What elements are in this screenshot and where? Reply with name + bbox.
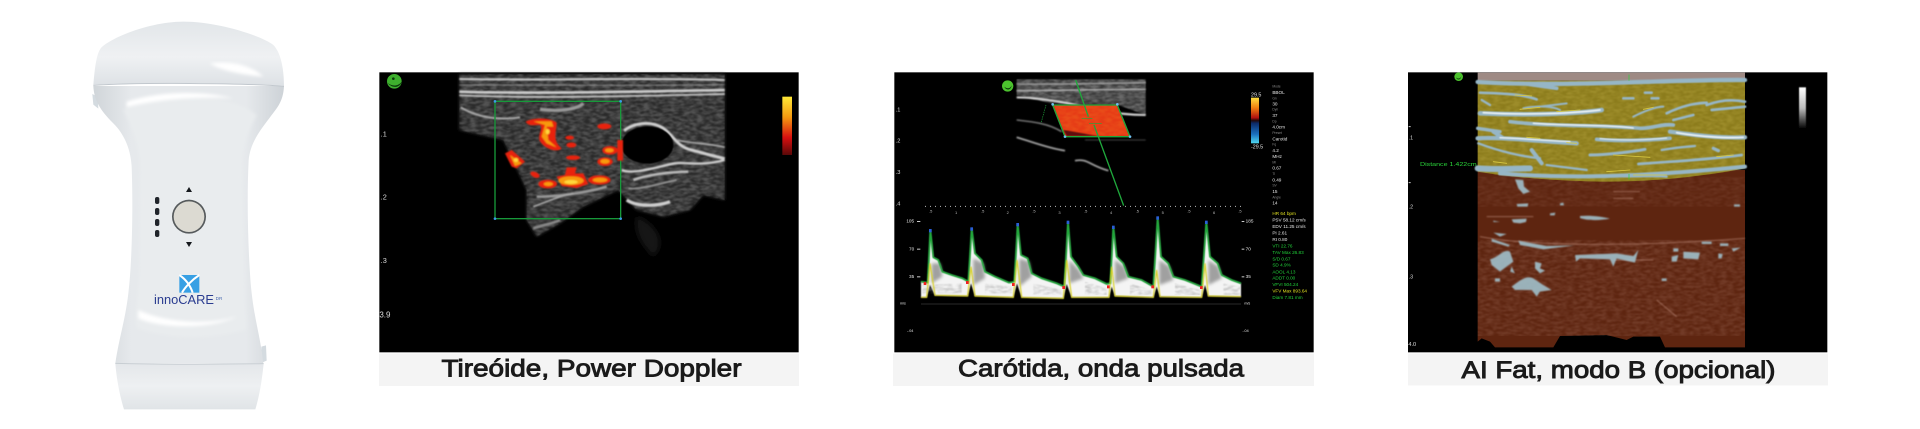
measurement column: RI 0.80: [1272, 237, 1288, 242]
settings column: Dyn: [1272, 108, 1278, 112]
measurement column: TAV Max 26.83: [1272, 250, 1304, 255]
caption: carotid: Carótida, onda pulsada: [958, 356, 1245, 382]
body inset panel: [123, 97, 257, 337]
depth labels: [896, 108, 900, 208]
settings column: 0.49: [1272, 177, 1282, 182]
orientation icon: [1454, 72, 1463, 81]
colour scale: -29.5: [1251, 145, 1263, 151]
head seam: [93, 83, 284, 86]
depth labels: .1: [896, 108, 900, 114]
colour scale: [1251, 93, 1263, 151]
measurement column: VFV Max 893.64: [1272, 289, 1307, 294]
side nubs: [92, 94, 267, 363]
measurement column: PI 2.61: [1272, 231, 1287, 236]
grey tissue: [459, 74, 725, 257]
time scale: .5: [1136, 209, 1140, 214]
measurement column: HR 64 bpm: [1272, 211, 1296, 216]
velocity axes: 70: [1246, 246, 1251, 251]
settings column: 0.67: [1272, 166, 1282, 171]
orientation icon: [1002, 80, 1013, 92]
time scale: .5: [1187, 209, 1191, 214]
depth labels: .2: [381, 193, 387, 202]
time scale: .5: [981, 209, 985, 214]
panel: AI fat b-mode: [1408, 72, 1827, 352]
measure marks: [1628, 75, 1630, 179]
muscle layer: [1478, 170, 1745, 347]
velocity axes: -.04: [1242, 329, 1249, 333]
depth labels: .2: [1409, 205, 1413, 211]
highlights on body: [127, 93, 237, 326]
scan background: [379, 72, 799, 352]
depth labels: .3: [896, 170, 900, 176]
settings column: Carotid: [1272, 136, 1288, 141]
probe body: [93, 86, 284, 363]
caption: thyroid: [379, 354, 799, 386]
scan background: [1408, 72, 1827, 352]
velocity axes: 70: [909, 246, 915, 251]
settings column: Gn: [1272, 96, 1277, 100]
region of interest box: [494, 100, 622, 220]
time scale: .5: [1032, 209, 1036, 214]
depth labels: .1: [381, 129, 387, 138]
bright reflections: [1483, 110, 1743, 142]
indicator LEDs: [155, 197, 159, 237]
measurement column: VTI 22.76: [1272, 244, 1293, 249]
depth labels: .4: [896, 202, 900, 208]
scan background: [894, 72, 1314, 352]
settings column: 37: [1272, 113, 1278, 118]
caption: thyroid: Tireóide, Power Doppler: [442, 356, 742, 382]
time scale: [925, 206, 1242, 215]
depth labels: .3: [381, 256, 387, 265]
velocity axes: 35: [1246, 274, 1251, 279]
bottom cap: [115, 363, 264, 409]
depth labels: .1: [1409, 135, 1413, 141]
settings column: Dp: [1272, 119, 1277, 123]
measurement column: [1272, 211, 1307, 300]
time scale: 1: [955, 210, 958, 215]
settings column: Fq: [1272, 143, 1276, 147]
velocity axes: m/s: [900, 301, 906, 305]
panel: thyroid power doppler: [379, 72, 799, 352]
settings column: Preset: [1272, 131, 1282, 135]
velocity axes: [900, 219, 1254, 333]
depth labels: .2: [896, 139, 900, 145]
settings column: 30: [1272, 101, 1278, 106]
settings column: MHz: [1272, 154, 1283, 159]
time scale: .5: [929, 209, 933, 214]
caption: carotid: [893, 354, 1314, 386]
colour scale: [782, 97, 792, 155]
colour box with flow: [1051, 103, 1131, 138]
doppler cursor line: [1041, 80, 1124, 206]
measurement column: S/D 0.67: [1272, 256, 1291, 261]
panel: carotid pulsed wave: [894, 72, 1314, 352]
b-mode image: [1017, 79, 1146, 171]
velocity axes: 185: [1246, 219, 1254, 224]
doppler flow signal: [505, 119, 623, 188]
logo text: innoCARE: [154, 293, 214, 307]
settings column: MI: [1272, 160, 1276, 164]
gradient bar: [1799, 87, 1806, 129]
time scale: 6: [1213, 210, 1216, 215]
measurement column: PSV 58.12 cm/s: [1272, 218, 1306, 223]
fascia in muscle: [1490, 179, 1741, 297]
logo mark: [179, 275, 199, 293]
depth labels: 4.0: [1408, 342, 1416, 348]
settings column: TI: [1272, 172, 1275, 176]
depth labels: [1408, 127, 1416, 348]
skin layer: [1478, 73, 1745, 81]
time scale: 2: [1007, 210, 1010, 215]
distance label: Distance 1.422cm: [1420, 162, 1477, 168]
settings column: 15: [1272, 189, 1278, 194]
button with arrows: [172, 187, 206, 247]
settings column: [1272, 84, 1288, 206]
settings column: 4.2: [1272, 148, 1279, 153]
time scale: 5: [1162, 210, 1165, 215]
settings column: 4.0cm: [1272, 125, 1285, 130]
orientation icon: [387, 74, 402, 89]
cap seam: [115, 362, 264, 366]
spectral waveform: [921, 216, 1241, 298]
measurement column: VFVI 504.24: [1272, 282, 1299, 287]
time scale: .5: [1084, 209, 1088, 214]
colour scale: 29.5: [1251, 93, 1261, 99]
probe head: [93, 22, 284, 86]
caption: AI fat: [1408, 354, 1828, 386]
velocity axes: 35: [909, 274, 915, 279]
velocity axes: 105: [906, 219, 915, 224]
measurement column: AOOL 4.13: [1272, 269, 1296, 274]
depth labels: .3: [1409, 274, 1413, 280]
settings column: SV: [1272, 184, 1278, 188]
fat layer: [1478, 81, 1745, 182]
settings column: 14: [1272, 201, 1278, 206]
measurement column: EDV 11.25 cm/s: [1272, 224, 1306, 229]
device: wireless ultrasound probe: [92, 22, 284, 409]
depth labels: [379, 129, 391, 320]
settings column: Angle: [1272, 196, 1281, 200]
time scale: .5: [1238, 209, 1242, 214]
measurement column: ADDT 0.00: [1272, 276, 1296, 281]
measurement column: SD 4.9%: [1272, 263, 1291, 268]
measurement column: Diam 7.81 mm: [1272, 295, 1303, 300]
logo text: DR: [216, 296, 223, 301]
settings column: BBOL: [1272, 90, 1285, 95]
velocity axes: -.04: [907, 329, 913, 333]
head highlight: [210, 62, 263, 77]
time scale: 3: [1058, 210, 1061, 215]
velocity axes: m/s: [1244, 301, 1250, 305]
settings column: Mode: [1272, 84, 1281, 88]
vessel lumen: [621, 126, 673, 164]
fascia streaks: [1478, 80, 1745, 177]
time scale: 4: [1110, 210, 1113, 215]
depth labels: 3.9: [379, 311, 391, 320]
caption: AI fat: AI Fat, modo B (opcional): [1462, 357, 1776, 384]
